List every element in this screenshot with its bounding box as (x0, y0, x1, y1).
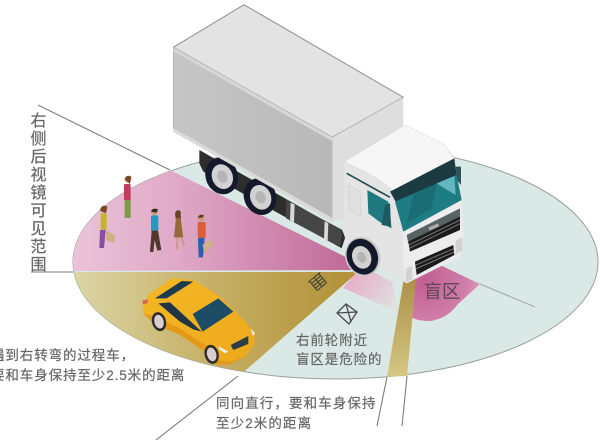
cab roof (344, 125, 454, 191)
truck chassis (199, 150, 347, 248)
car body (143, 278, 255, 365)
visor tab (456, 167, 461, 185)
side windows (158, 302, 202, 332)
headlights (218, 346, 228, 353)
cab front lower panel (403, 198, 463, 283)
vertical label: right rear mirror visible range: 侧 (30, 130, 47, 148)
cab stripe (347, 173, 390, 197)
grille panel (407, 208, 460, 243)
leader lines (31, 105, 535, 440)
vertical label: right rear mirror visible range: 视 (30, 166, 47, 184)
rear window (155, 281, 193, 298)
upper grille (408, 217, 460, 252)
truck cab (339, 125, 463, 283)
windshield (193, 298, 233, 332)
person in orange with bag (198, 214, 213, 257)
zone: gold straight-ahead strip (387, 278, 416, 377)
sun visor (390, 158, 457, 203)
side window (367, 190, 392, 228)
vertical label: right rear mirror visible range: 镜 (30, 183, 47, 202)
door panel (348, 185, 361, 217)
zone: right rear mirror visible area (73, 170, 351, 271)
label: same direction clearance: 至少2米的距离 (216, 415, 312, 431)
label: right front wheel warning: 盲区是危险的 (296, 351, 382, 367)
cargo box side (173, 47, 332, 222)
zone: pale pink front wheel area (343, 266, 398, 312)
vertical label: right rear mirror visible range: 范 (30, 238, 47, 256)
zone: gold turning clearance area (74, 272, 356, 372)
vertical label: right rear mirror visible range: 后 (30, 148, 47, 166)
vertical label: right rear mirror visible range: 见 (30, 221, 47, 238)
lights (406, 237, 462, 282)
label: right front wheel warning: 右前轮附近 (296, 332, 368, 348)
icon: diamond cross marker (337, 304, 357, 324)
cargo box front (332, 97, 403, 222)
person in brown dress (174, 210, 184, 249)
car (143, 278, 255, 365)
label: same direction clearance: 同向直行，要和车身保持 (216, 395, 377, 411)
windshield (395, 175, 462, 232)
cab body (341, 125, 463, 283)
rear wheel 2 (238, 173, 282, 220)
person in yellow and purple with bag (99, 206, 115, 248)
zone: blind area (403, 265, 480, 321)
tail light (143, 299, 148, 304)
cargo box top (173, 5, 403, 137)
rear wheel (150, 311, 168, 333)
side tank (286, 200, 343, 247)
front wheel (339, 232, 386, 282)
person in red and green (124, 176, 131, 218)
ground ellipse: viewing zones (72, 150, 598, 380)
label: blind zone: 盲区 (423, 281, 461, 302)
icon: basket marker (308, 272, 328, 292)
front wheel (202, 343, 221, 365)
grille (231, 336, 248, 350)
vertical label: right rear mirror visible range: 右 (30, 112, 47, 130)
lower grille (415, 245, 454, 275)
vertical label: right rear mirror visible range (30, 112, 47, 274)
vertical label: right rear mirror visible range: 围 (30, 256, 47, 274)
mirror (382, 203, 391, 227)
rear wheel 1 (200, 153, 243, 199)
people group (99, 176, 213, 257)
vertical label: right rear mirror visible range: 可 (30, 203, 47, 220)
person in blue (150, 208, 161, 252)
truck (173, 5, 403, 248)
